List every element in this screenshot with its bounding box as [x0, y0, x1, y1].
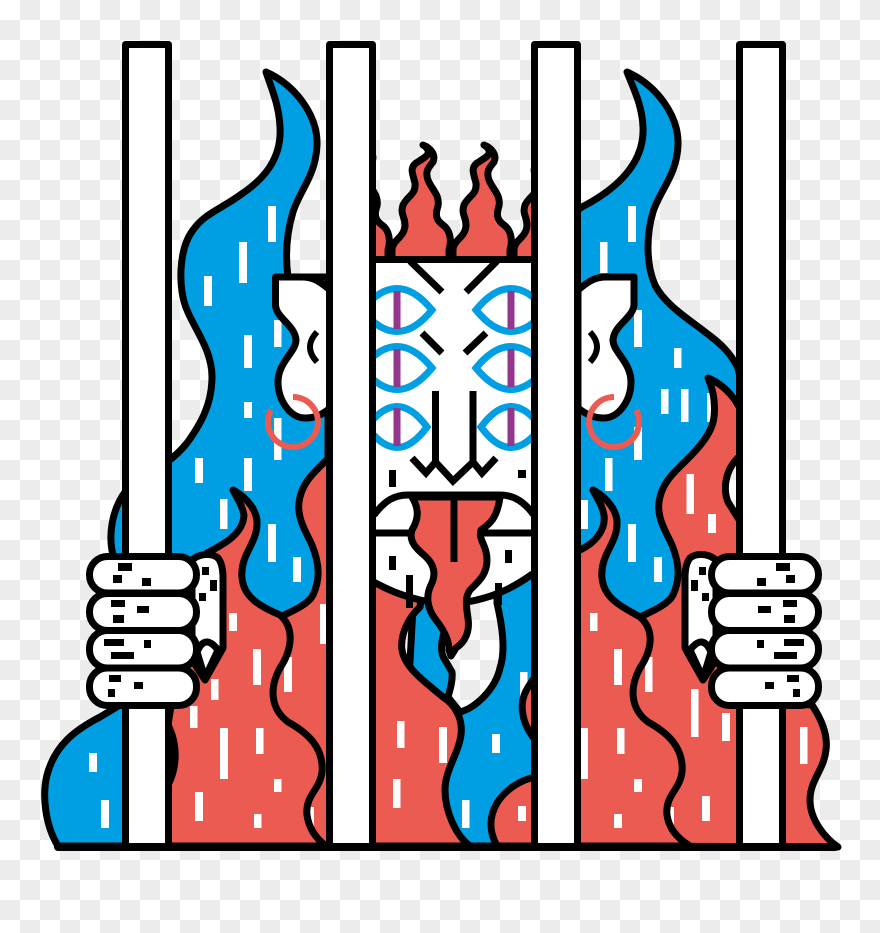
left blue flame	[45, 72, 328, 846]
mouth	[374, 495, 534, 533]
red flame: front left	[165, 490, 326, 846]
brow and nose lines	[410, 261, 497, 481]
six eyes	[362, 288, 546, 448]
right blue flame	[574, 72, 745, 846]
face marks	[389, 470, 526, 608]
red flame: rear left and centre	[240, 378, 470, 846]
cage bars	[126, 44, 782, 848]
right hand	[685, 554, 818, 706]
left ear	[276, 277, 330, 418]
face	[362, 260, 546, 656]
cage floor line	[58, 843, 835, 851]
central blue drop and window	[400, 570, 535, 846]
red flame: rear right	[600, 378, 838, 847]
tongue	[411, 497, 500, 656]
right ear	[578, 277, 634, 418]
flames above the head	[331, 145, 572, 262]
left hand	[90, 554, 223, 706]
right earring	[589, 397, 639, 447]
left earring	[268, 397, 318, 447]
red flame: front right	[574, 490, 690, 846]
